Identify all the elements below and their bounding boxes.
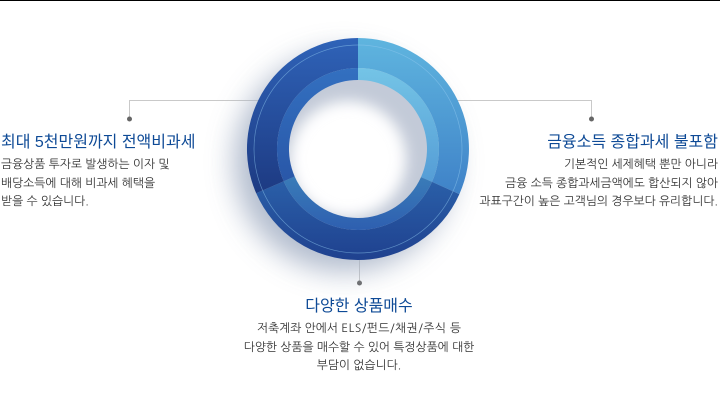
ring drop shadow — [234, 52, 454, 272]
segment: bottom navy — [256, 176, 459, 260]
donut chart with leader lines — [0, 0, 720, 288]
body: right: 금융 소득 종합과세금액에도 합산되지 않아 — [505, 176, 718, 188]
donut — [234, 38, 469, 272]
text block: bottom — [244, 298, 474, 371]
body: bottom: 다양한 상품을 매수할 수 있어 특정상품에 대한 — [244, 340, 474, 352]
segment: right light blue — [358, 38, 469, 194]
top border — [0, 0, 720, 1]
body: bottom — [244, 322, 474, 371]
body: bottom: 부담이 없습니다. — [317, 359, 401, 371]
leader line: left — [127, 100, 270, 122]
hole with inner shadow — [289, 80, 427, 218]
body: left — [1, 158, 169, 207]
heading: bottom: 다양한 상품매수 — [305, 298, 413, 315]
heading: left: 최대 5천만원까지 전액비과세 — [1, 134, 195, 151]
heading: right: 금융소득 종합과세 불포함 — [547, 134, 718, 151]
body: left: 받을 수 있습니다. — [1, 195, 89, 207]
body: bottom: 저축계좌 안에서 ELS/펀드/채권/주식 등 — [257, 322, 461, 334]
text block: left — [1, 134, 195, 207]
thin inner ring line — [254, 45, 462, 253]
leader line: bottom — [357, 250, 362, 286]
text block: right — [479, 134, 718, 207]
body: right — [479, 158, 718, 207]
leader line: right — [450, 100, 594, 122]
body: left: 금융상품 투자로 발생하는 이자 및 — [1, 158, 169, 170]
body: right: 기본적인 세제혜택 뿐만 아니라 — [564, 158, 718, 170]
body: right: 과표구간이 높은 고객님의 경우보다 유리합니다. — [479, 195, 718, 207]
body: left: 배당소득에 대해 비과세 혜택을 — [1, 176, 155, 188]
segment: left blue — [247, 38, 358, 193]
